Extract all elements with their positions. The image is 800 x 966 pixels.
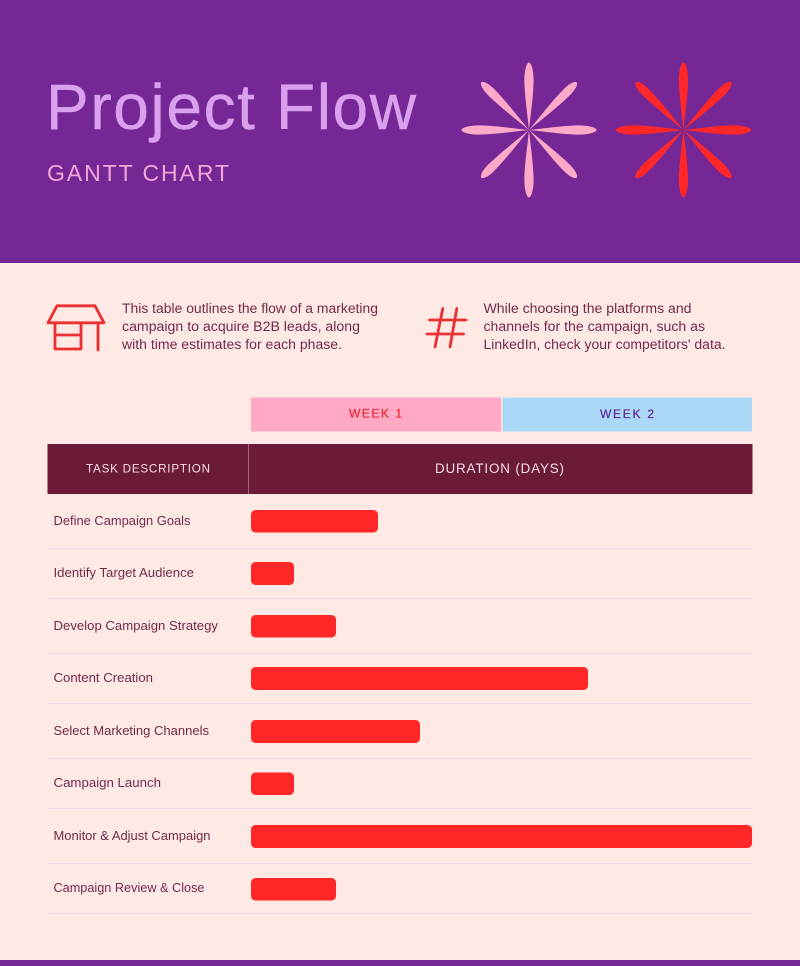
row: Develop Campaign Strategy	[48, 615, 752, 654]
row: Select Marketing Channels	[48, 720, 752, 759]
row: Identify Target Audience: Identify Target Audience	[54, 566, 194, 580]
week 1 header: WEEK 1	[349, 406, 402, 420]
icon: pink flower	[462, 62, 596, 198]
week 1 header	[251, 398, 501, 432]
text block: table intro	[121, 301, 378, 352]
row: Monitor & Adjust Campaign	[48, 825, 752, 864]
row: Content Creation: Content Creation	[54, 671, 153, 685]
row: Campaign Launch	[48, 772, 752, 809]
icon: storefront	[48, 306, 104, 350]
icon: red flower	[616, 62, 751, 198]
subtitle: GANTT CHART	[47, 160, 229, 186]
row: Content Creation	[48, 667, 752, 704]
table header	[48, 444, 752, 494]
footer strip	[0, 960, 800, 966]
column heading: duration: DURATION (DAYS)	[435, 461, 564, 476]
text block: platform advice: channels for the campaign, such as	[484, 319, 705, 334]
text block: platform advice	[484, 301, 726, 352]
row: Campaign Review & Close	[48, 878, 752, 914]
text block: table intro: This table outlines the flow of a marketing	[122, 301, 378, 316]
week 2 header	[502, 398, 752, 432]
text block: platform advice: LinkedIn, check your competitors' data.	[484, 337, 726, 352]
title: Project Flow	[46, 71, 417, 143]
row: Campaign Review & Close: Campaign Review & Close	[54, 881, 204, 895]
row: Define Campaign Goals: Define Campaign Goals	[54, 514, 190, 528]
header panel	[0, 0, 800, 263]
row: Develop Campaign Strategy: Develop Campaign Strategy	[54, 619, 219, 633]
row: Identify Target Audience	[48, 562, 752, 599]
text block: table intro: campaign to acquire B2B leads, along	[122, 319, 360, 334]
text block: platform advice: While choosing the platforms and	[484, 301, 692, 316]
week 2 header: WEEK 2	[600, 407, 654, 421]
row: Monitor & Adjust Campaign: Monitor & Adjust Campaign	[54, 829, 210, 843]
row: Select Marketing Channels: Select Marketing Channels	[54, 724, 209, 738]
column heading: task description: TASK DESCRIPTION	[86, 462, 210, 475]
icon: hash symbol	[427, 308, 466, 347]
row: Campaign Launch: Campaign Launch	[54, 776, 161, 790]
row: Define Campaign Goals	[48, 510, 752, 549]
text block: table intro: with time estimates for each phase.	[121, 337, 342, 352]
